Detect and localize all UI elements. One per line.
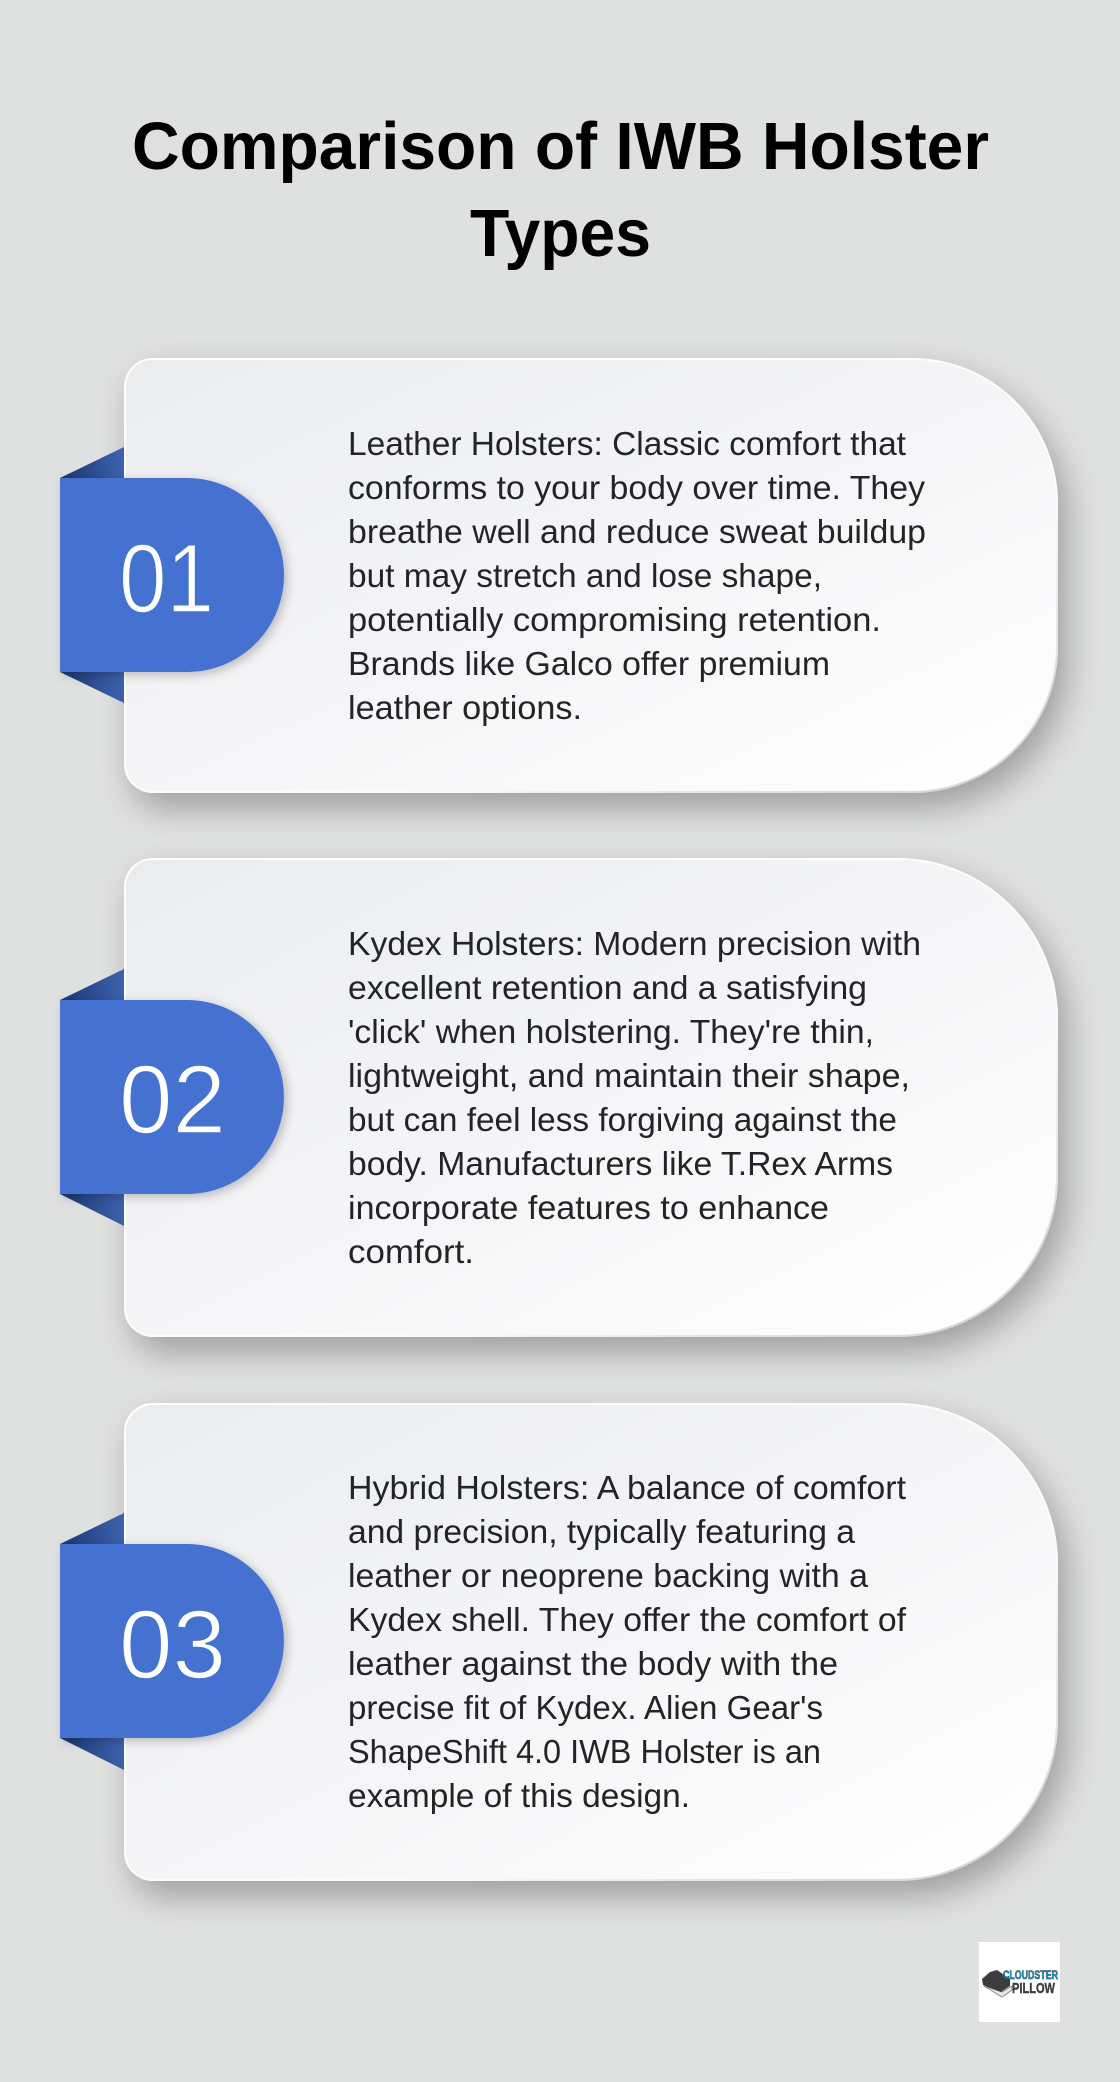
- panel: leather holsters: [60, 359, 1057, 792]
- text: kydex: [348, 925, 921, 1270]
- text: leather: conforms to your body over time. They: [348, 469, 926, 506]
- title: Comparison of IWB Holster: [132, 109, 989, 184]
- panel: kydex holsters: [60, 859, 1057, 1336]
- text: leather: potentially compromising retention.: [348, 601, 881, 638]
- text: hybrid: and precision, typically featuring a: [348, 1513, 856, 1550]
- text: hybrid: ShapeShift 4.0 IWB Holster is an: [348, 1733, 821, 1770]
- title: [132, 109, 989, 271]
- ribbon fold top 3: [60, 1513, 124, 1544]
- panel: hybrid holsters: [60, 1404, 1057, 1880]
- text: leather: but may stretch and lose shape,: [348, 557, 822, 594]
- logo wordmark: PILLOW: [1012, 1980, 1056, 1997]
- text: kydex: incorporate features to enhance: [348, 1189, 829, 1226]
- title: Types: [470, 196, 651, 271]
- text: leather: Leather Holsters: Classic comfort that: [348, 425, 906, 462]
- ribbon fold bottom 2: [60, 1194, 124, 1226]
- logo wordmark: CLOUDSTER: [1003, 1968, 1058, 1982]
- ribbon fold bottom 3: [60, 1738, 124, 1770]
- card background 3: [125, 1404, 1057, 1880]
- card background 2: [125, 859, 1057, 1336]
- text: kydex: 'click' when holstering. They're thin,: [348, 1013, 874, 1050]
- number tab 3: [60, 1544, 284, 1738]
- number 03: 03: [119, 1590, 226, 1699]
- text: hybrid: Hybrid Holsters: A balance of comfort: [348, 1469, 906, 1506]
- number tab 2: [60, 1000, 284, 1194]
- number tab 1: [60, 478, 284, 672]
- text: kydex: body. Manufacturers like T.Rex Arms: [348, 1145, 893, 1182]
- ribbon fold top 1: [60, 447, 124, 478]
- number 01: 01: [119, 524, 214, 633]
- text: kydex: lightweight, and maintain their shape,: [348, 1057, 910, 1094]
- text: hybrid: Kydex shell. They offer the comfort of: [348, 1601, 907, 1638]
- text: hybrid: leather against the body with the: [348, 1645, 838, 1682]
- text: hybrid: [348, 1469, 907, 1814]
- text: leather: [348, 425, 926, 726]
- logo wordmark: [1003, 1968, 1058, 1997]
- text: kydex: comfort.: [348, 1233, 474, 1270]
- icon: pillow: [982, 1970, 1012, 1997]
- text: kydex: Kydex Holsters: Modern precision with: [348, 925, 921, 962]
- text: leather: leather options.: [348, 689, 582, 726]
- ribbon fold top 2: [60, 969, 124, 1000]
- text: hybrid: example of this design.: [348, 1777, 690, 1814]
- ribbon fold bottom 1: [60, 672, 124, 703]
- text: kydex: but can feel less forgiving against the: [348, 1101, 897, 1138]
- logo: Cloudster Pillow: [979, 1942, 1060, 2022]
- text: hybrid: leather or neoprene backing with a: [348, 1557, 869, 1594]
- card background 1: [125, 359, 1057, 792]
- text: kydex: excellent retention and a satisfying: [348, 969, 867, 1006]
- text: leather: breathe well and reduce sweat buildup: [348, 513, 926, 550]
- text: leather: Brands like Galco offer premium: [348, 645, 830, 682]
- number 02: 02: [119, 1045, 226, 1154]
- text: hybrid: precise fit of Kydex. Alien Gear's: [348, 1689, 823, 1726]
